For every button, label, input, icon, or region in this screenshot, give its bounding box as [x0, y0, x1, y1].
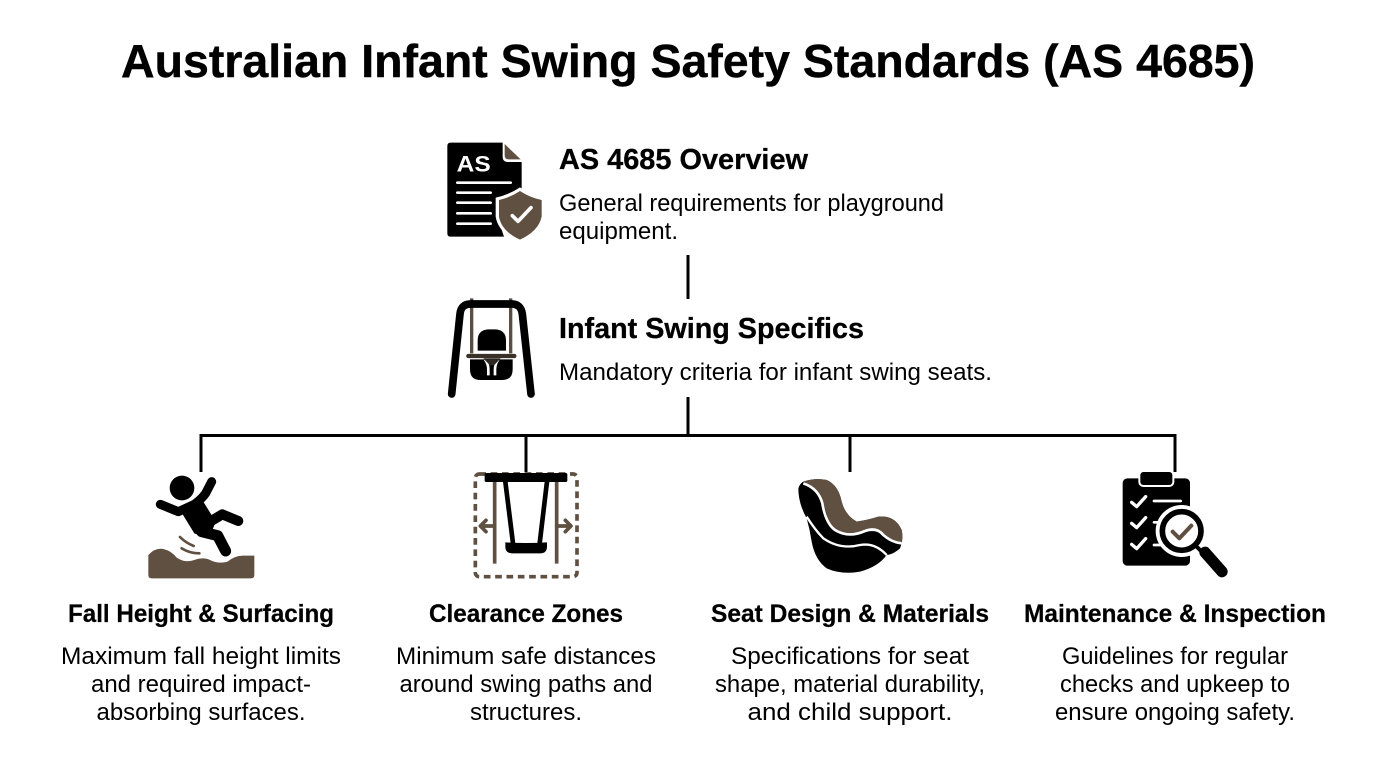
- heading: AS 4685 Overview: AS 4685 Overview: [559, 144, 808, 176]
- icon: clipboard with magnifier: [1123, 471, 1222, 572]
- text: maintenance description: checks and upkeep to: [1060, 671, 1290, 698]
- panel: AS 4685 overview: [447, 143, 944, 245]
- panel: maintenance and inspection: [1024, 471, 1326, 726]
- icon: contoured seat: [798, 479, 902, 573]
- icon: falling child: [148, 476, 254, 578]
- text: seat description: shape, material durability,: [715, 671, 985, 698]
- icon: infant swing: [452, 298, 531, 394]
- connector lines: [201, 255, 1175, 472]
- text: seat description: Specifications for seat: [731, 643, 969, 670]
- text: fall height description: absorbing surfaces.: [96, 699, 306, 726]
- icon: swing clearance: [475, 473, 577, 577]
- heading: Seat Design & Materials: Seat Design & Materials: [711, 600, 989, 628]
- text: overview description: General requirements for playground: [559, 190, 944, 217]
- panel: clearance zones: [396, 473, 656, 726]
- heading: Clearance Zones: Clearance Zones: [429, 600, 623, 628]
- text: clearance description: around swing paths and: [400, 671, 652, 698]
- heading: Infant Swing Specifics: Infant Swing Specifics: [559, 313, 864, 345]
- panel: seat design and materials: [711, 479, 989, 726]
- text: seat description: and child support.: [748, 699, 952, 726]
- heading: Maintenance & Inspection: Maintenance & Inspection: [1024, 600, 1326, 628]
- icon: certified document: [447, 143, 545, 243]
- heading: Fall Height & Surfacing: Fall Height & Surfacing: [68, 600, 334, 628]
- icon: certified document: AS: [457, 152, 491, 177]
- text: maintenance description: Guidelines for regular: [1062, 643, 1288, 670]
- text: overview description: equipment.: [559, 218, 678, 245]
- title: Australian Infant Swing Safety Standards (AS 4685): [121, 35, 1255, 87]
- text: fall height description: Maximum fall height limits: [61, 643, 341, 670]
- text: fall height description: and required impact-: [91, 671, 311, 698]
- panel: infant swing specifics: [452, 298, 992, 394]
- text: clearance description: Minimum safe distances: [396, 643, 656, 670]
- panel: fall height and surfacing: [61, 476, 341, 726]
- text: maintenance description: ensure ongoing safety.: [1055, 699, 1295, 726]
- text: clearance description: structures.: [470, 699, 582, 726]
- text: specifics description: Mandatory criteria for infant swing seats.: [559, 359, 992, 386]
